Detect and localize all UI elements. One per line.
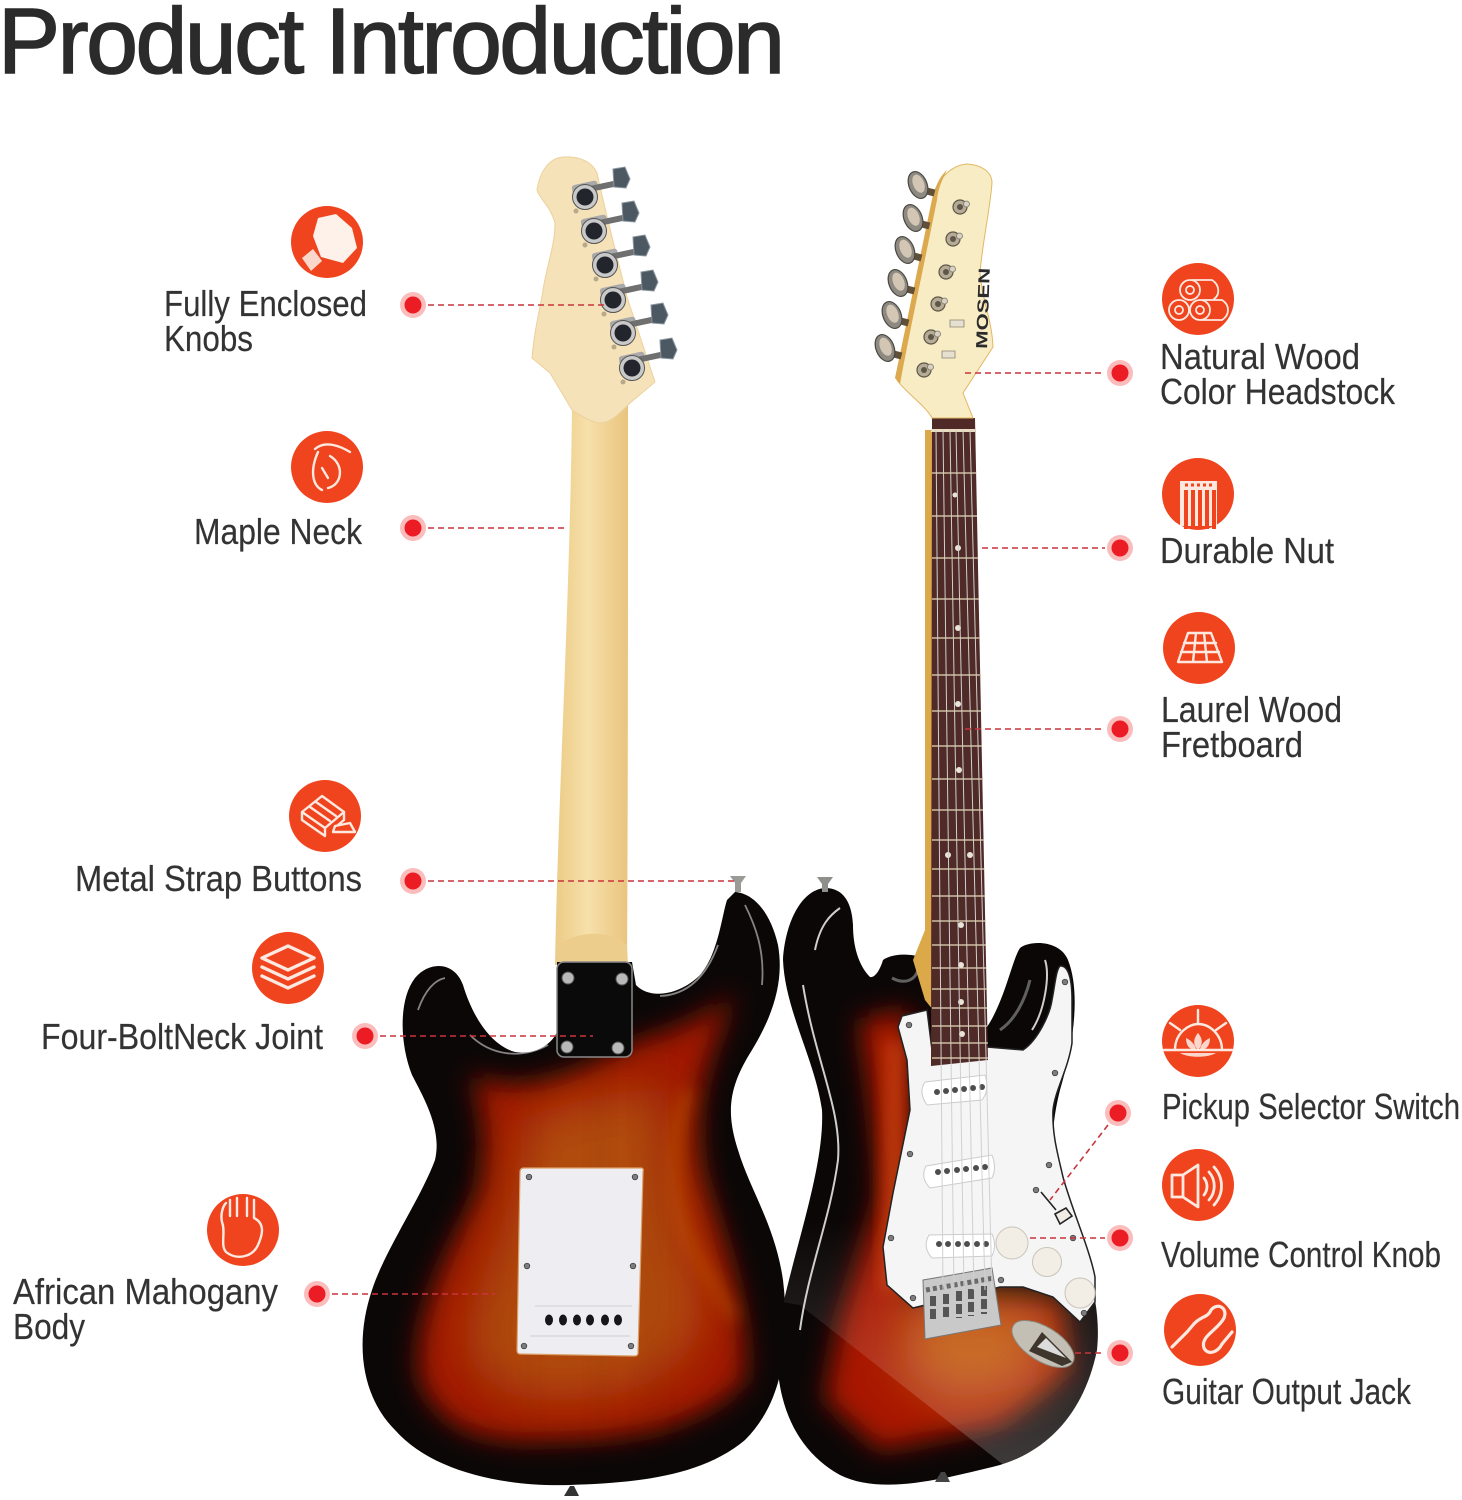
callout: African Mahogany Body: African Mahogany <box>13 1271 278 1312</box>
callout: Natural Wood Color Headstock: Color Headstock <box>1160 371 1396 412</box>
headstock side edge <box>895 170 947 384</box>
strap button top <box>817 877 833 892</box>
callout: Guitar Output Jack <box>1075 1294 1412 1412</box>
brand text: MOSEN <box>974 268 994 349</box>
guitar: front view <box>770 164 1110 1500</box>
callout: Four-Bolt Neck Joint <box>41 932 593 1057</box>
back cover plate <box>517 1168 643 1356</box>
strap button bottom <box>564 1486 579 1496</box>
callout: Durable Nut: Durable Nut <box>1160 530 1334 571</box>
callout: Pickup Selector Switch <box>1050 1005 1460 1200</box>
back body <box>350 880 795 1490</box>
callout: Metal Strap Buttons <box>75 780 735 899</box>
body gloss <box>418 905 763 1054</box>
callout: Metal Strap Buttons: Metal Strap Buttons <box>75 858 362 899</box>
pickguard <box>883 966 1095 1322</box>
callout: African Mahogany Body: Body <box>13 1306 85 1347</box>
glare <box>784 1260 1098 1464</box>
callout: Maple Neck: Maple Neck <box>194 511 363 552</box>
neck plate <box>557 962 632 1057</box>
pickups <box>922 1075 994 1258</box>
strings <box>936 430 992 1290</box>
back headstock <box>532 157 655 423</box>
callout: Maple Neck <box>194 431 568 552</box>
front body <box>770 880 1110 1500</box>
pickup selector switch <box>1041 1192 1072 1224</box>
strap button bottom <box>935 1472 950 1482</box>
tuning machines back <box>571 167 677 384</box>
body gloss edge <box>800 908 1047 1330</box>
callout: Natural Wood Color Headstock <box>965 263 1396 412</box>
tuner pegs <box>917 200 970 377</box>
pickguard screws <box>888 979 1087 1316</box>
guitar: back view <box>350 157 795 1496</box>
string tree labels <box>942 320 964 358</box>
callout: African Mahogany Body <box>13 1194 495 1347</box>
fretboard <box>931 418 988 1066</box>
bridge <box>923 1268 1001 1339</box>
callout: Laurel Wood Fretboard: Laurel Wood <box>1161 689 1342 730</box>
callout: Four-Bolt Neck Joint: Four-BoltNeck Joint <box>41 1016 323 1057</box>
tuner knobs <box>871 169 935 364</box>
callout: Volume Control Knob <box>1030 1149 1441 1275</box>
callout: Laurel Wood Fretboard: Fretboard <box>1161 724 1303 765</box>
callout: Natural Wood Color Headstock: Natural Wood <box>1160 336 1360 377</box>
strap button top <box>730 876 746 892</box>
callout: Guitar Output Jack: Guitar Output Jack <box>1162 1371 1412 1412</box>
neck side <box>913 430 933 1010</box>
back neck <box>555 405 628 965</box>
back neck heel <box>556 934 628 965</box>
inner horn gloss <box>892 970 1030 1030</box>
callout: Laurel Wood Fretboard <box>965 612 1342 765</box>
output jack <box>1004 1311 1082 1377</box>
callout: Durable Nut <box>982 458 1334 571</box>
front headstock <box>897 164 993 418</box>
callout: Fully Enclosed Knobs <box>164 206 605 359</box>
callout: Fully Enclosed Knobs: Fully Enclosed <box>164 283 367 324</box>
control knobs <box>996 1227 1095 1308</box>
callout: Fully Enclosed Knobs: Knobs <box>164 318 253 359</box>
